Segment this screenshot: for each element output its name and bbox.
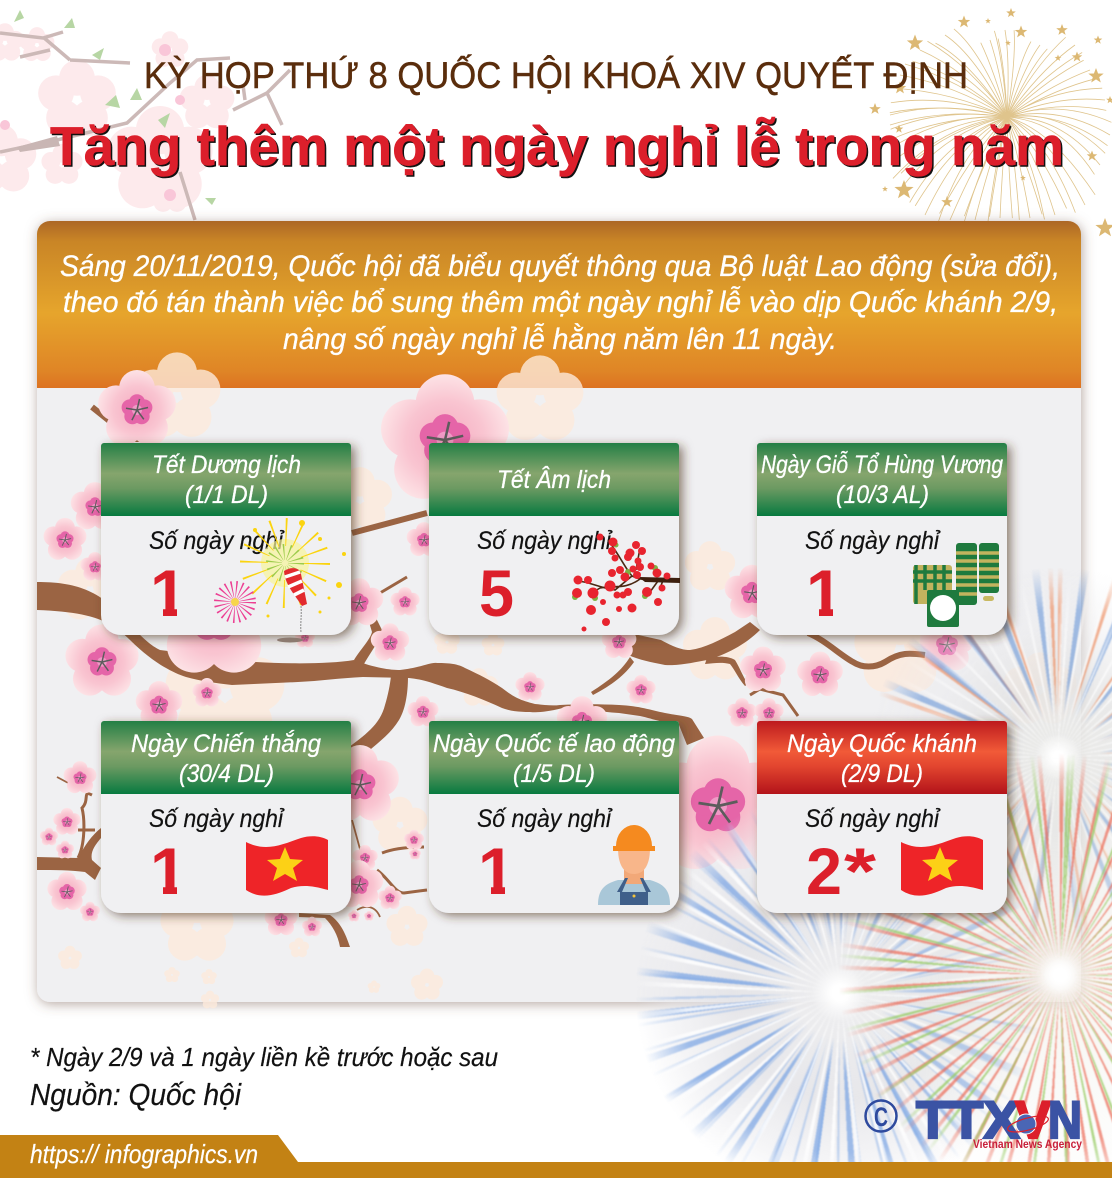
card: Ngày Quốc khánh: (2/9 DL): [841, 760, 923, 788]
card: Tết Dương lịch: [101, 443, 351, 642]
firework: orange and blue right: [868, 567, 1112, 947]
card: Tết Dương lịch: (1/1 DL): [185, 481, 268, 509]
card: Ngày Quốc tế lao động: [429, 721, 679, 913]
logo: TTXVN: TTX: [916, 1091, 1020, 1150]
card: Ngày Quốc tế lao động: Số ngày nghỉ: [477, 805, 613, 833]
card: Ngày Chiến thắng: Ngày Chiến thắng: [131, 729, 321, 758]
logo: TTXVN: C: [874, 1102, 888, 1132]
blossom tree inside panel: [37, 352, 1077, 1008]
logo: TTXVN: [866, 1091, 1083, 1151]
card: Ngày Quốc khánh: 2: [806, 834, 842, 908]
website url: https:// infographics.vn: [30, 1139, 258, 1169]
intro text: [60, 250, 1060, 356]
icon: worker: [598, 825, 670, 905]
icon: ancestral rice cakes: [913, 543, 999, 627]
card: Tết Dương lịch: Tết Dương lịch: [152, 451, 301, 479]
icon: red peach blossom branch: [572, 534, 680, 632]
logo: TTXVN: N: [1048, 1091, 1082, 1150]
logo: TTXVN: Vietnam News Agency: [973, 1139, 1083, 1151]
footnote: * Ngày 2/9 và 1 ngày liền kề trước hoặc sau: [30, 1042, 498, 1072]
main heading: Tăng thêm một ngày nghỉ lễ trong năm: [50, 115, 1064, 177]
footer bar: [0, 1135, 1112, 1178]
icon: Vietnam flag: [901, 836, 983, 896]
intro text: Sáng 20/11/2019, Quốc hội đã biểu quyết thông qua Bộ luật Lao động (sửa đổi),: [60, 250, 1060, 283]
card: Ngày Quốc khánh: Số ngày nghỉ: [805, 805, 941, 833]
panel: main: [37, 221, 1081, 1002]
card: Tết Dương lịch: Số ngày nghỉ: [149, 527, 285, 555]
card: Tết Dương lịch: 1: [150, 556, 187, 630]
title: KỲ HỌP THỨ 8 QUỐC HỘI KHOÁ XIV QUYẾT ĐỊNH: [144, 54, 968, 96]
card: Ngày Chiến thắng: 1: [150, 834, 187, 908]
blossoms top left: [0, 10, 290, 220]
card: Ngày Quốc khánh: *: [844, 834, 876, 908]
card: Tết Âm lịch: Tết Âm lịch: [497, 465, 611, 494]
card: Ngày Quốc tế lao động: (1/5 DL): [513, 760, 595, 788]
card: Ngày Giỗ Tổ Hùng Vương: [757, 443, 1007, 635]
source: Nguồn: Quốc hội: [30, 1077, 242, 1112]
panel header: intro background: [37, 221, 1081, 388]
card: Tết Âm lịch: Số ngày nghỉ: [477, 527, 613, 555]
card: Ngày Quốc tế lao động: Ngày Quốc tế lao động: [433, 730, 675, 758]
icon: fireworks and rocket: [223, 520, 346, 642]
card: Ngày Giỗ Tổ Hùng Vương: Số ngày nghỉ: [805, 527, 941, 555]
logo: TTXVN: V: [1015, 1091, 1051, 1150]
icon: Vietnam flag: [246, 836, 328, 896]
main heading: Tăng thêm một ngày nghỉ lễ trong năm: [52, 116, 1066, 178]
intro text: nâng số ngày nghỉ lễ hằng năm lên 11 ngày.: [283, 323, 837, 356]
card: Ngày Quốc khánh: Ngày Quốc khánh: [787, 730, 977, 758]
firework: blue and white centre: [638, 814, 1036, 1162]
card: Ngày Giỗ Tổ Hùng Vương: Ngày Giỗ Tổ Hùng Vương: [761, 450, 1003, 479]
card: Ngày Giỗ Tổ Hùng Vương: (10/3 AL): [836, 481, 929, 509]
card: Ngày Quốc khánh: [757, 721, 1007, 913]
card: Tết Âm lịch: 5: [479, 556, 514, 630]
card: Ngày Giỗ Tổ Hùng Vương: 1: [806, 556, 843, 630]
card: Ngày Chiến thắng: (30/4 DL): [179, 760, 274, 788]
fireworks top right: [869, 8, 1112, 236]
card: Ngày Chiến thắng: [101, 721, 351, 913]
card: Ngày Chiến thắng: Số ngày nghỉ: [149, 805, 285, 833]
intro text: theo đó tán thành việc bổ sung thêm một ngày nghỉ lễ vào dịp Quốc khánh 2/9,: [63, 286, 1058, 319]
firework: red and green bottom right: [838, 753, 1112, 1178]
card: Ngày Quốc tế lao động: 1: [478, 834, 515, 908]
card: Tết Âm lịch: [429, 443, 680, 635]
